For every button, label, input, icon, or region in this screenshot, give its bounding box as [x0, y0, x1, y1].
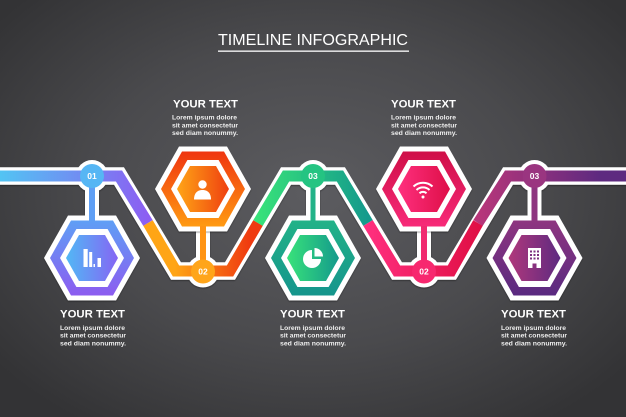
step 5 [486, 164, 582, 348]
text block 1 [60, 308, 126, 348]
hexagon 1 [44, 216, 140, 300]
text block 1: sed diam nonummy. [60, 340, 126, 348]
text block 3: sit amet consectetur [280, 333, 346, 340]
node 02 [412, 260, 436, 284]
text block 3: YOUR TEXT [280, 308, 345, 320]
step 4 [376, 98, 472, 284]
text block 4: Lorem ipsum dolore [391, 114, 456, 122]
hexagon 2 [155, 146, 251, 232]
connector 3 [310, 176, 316, 221]
connector 4 [421, 226, 427, 271]
node 02: 02 [198, 267, 208, 277]
text block 5 [501, 308, 567, 348]
icon: pie chart [303, 248, 323, 268]
text block 5: YOUR TEXT [501, 308, 566, 320]
text block 3: Lorem ipsum dolore [280, 325, 345, 332]
text block 2: sit amet consectetur [172, 122, 238, 129]
text block 1: sit amet consectetur [60, 333, 126, 340]
text block 1: Lorem ipsum dolore [60, 325, 125, 332]
connector 2 [200, 226, 206, 271]
text block 2: sed diam nonummy. [172, 130, 238, 137]
text block 4: sed diam nonummy. [391, 130, 457, 137]
text block 2: YOUR TEXT [173, 98, 238, 110]
text block 4 [391, 98, 457, 137]
node 02 [191, 260, 215, 284]
text block 4: sit amet consectetur [391, 122, 457, 129]
connector 1 [89, 176, 95, 221]
text block 5: sed diam nonummy. [501, 340, 567, 348]
hexagon 4 [376, 146, 472, 232]
text block 5: sit amet consectetur [501, 333, 567, 340]
text block 2 [172, 98, 238, 137]
connector 5 [532, 176, 538, 221]
icon: person [194, 180, 211, 200]
text block 5: Lorem ipsum dolore [501, 325, 566, 332]
timeline path [0, 160, 626, 288]
node 03 [301, 164, 325, 188]
node 03: 03 [308, 171, 318, 181]
node 01 [80, 164, 104, 188]
hexagon 3 [265, 216, 361, 300]
node 03: 03 [530, 171, 539, 181]
step 3 [265, 164, 361, 348]
node 01: 01 [87, 171, 97, 181]
icon: wifi [414, 183, 432, 198]
title: TIMELINE INFOGRAPHIC [218, 32, 408, 49]
step 2 [155, 98, 251, 284]
text block 2: Lorem ipsum dolore [172, 114, 237, 122]
text block 4: YOUR TEXT [391, 98, 456, 110]
text block 1: YOUR TEXT [60, 308, 125, 320]
hexagon 5 [486, 216, 582, 300]
icon: building [528, 248, 541, 268]
node 03 [522, 164, 546, 188]
icon: bar chart [84, 249, 101, 267]
step 1 [44, 164, 140, 348]
text block 3 [280, 308, 346, 348]
node 02: 02 [419, 267, 429, 277]
text block 3: sed diam nonummy. [280, 340, 346, 348]
